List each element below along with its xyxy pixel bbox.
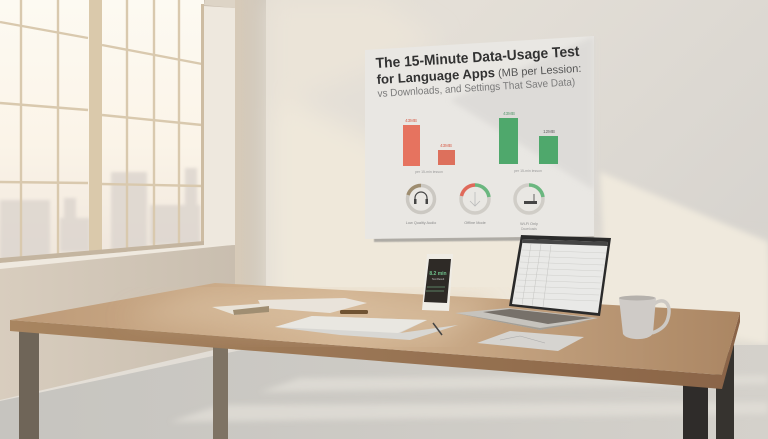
documents at front of desk bbox=[275, 316, 458, 340]
documents right of laptop bbox=[477, 331, 584, 351]
laptop screen bbox=[509, 235, 611, 316]
stacked papers on desk bbox=[212, 298, 368, 315]
diagonal sun band right of poster bbox=[600, 172, 768, 345]
gauge: low quality audio bbox=[406, 185, 436, 225]
gauge: wi-fi only: Wi-Fi Only bbox=[520, 222, 538, 226]
title: The 15-Minute Data-Usage Test bbox=[375, 44, 580, 72]
laptop bbox=[455, 235, 611, 330]
floor bbox=[0, 345, 768, 439]
right frame bbox=[201, 4, 204, 245]
city skyline bbox=[0, 168, 200, 260]
window bbox=[0, 0, 235, 269]
table bbox=[10, 283, 740, 389]
window reveal bbox=[204, 6, 235, 246]
title: vs Downloads, and Settings That Save Data) bbox=[377, 76, 576, 100]
bar chart: green: 43MB bbox=[503, 111, 515, 116]
wall poster bbox=[365, 36, 594, 242]
poster shadow bbox=[374, 236, 594, 242]
poster diagonal shade bbox=[450, 36, 594, 190]
bar chart: green bbox=[499, 111, 558, 173]
bar chart: green: 12MB bbox=[543, 129, 555, 134]
window frame bbox=[0, 0, 202, 258]
gauge: low quality audio: Low Quality Audio bbox=[406, 221, 436, 225]
smartphone: Test Result bbox=[432, 278, 444, 281]
bar chart: red bbox=[403, 118, 455, 174]
gauge: wi-fi only bbox=[515, 185, 543, 231]
shadowed wall band beside the window bbox=[235, 0, 266, 350]
lower frame bbox=[0, 241, 204, 263]
smartphone: 8.2 min bbox=[429, 271, 447, 277]
gauge: wi-fi only: Downloads bbox=[521, 227, 537, 231]
coffee mug bbox=[619, 296, 669, 339]
bar chart: green: per 15-min lesson bbox=[514, 169, 542, 173]
smartphone bbox=[422, 254, 453, 311]
window sill bbox=[0, 245, 232, 269]
gauge: offline mode bbox=[461, 185, 489, 225]
floor sun stripes bbox=[170, 375, 768, 422]
spreadsheet rows bbox=[514, 244, 606, 307]
laptop base bbox=[455, 308, 598, 330]
title: for Language Apps (MB per Lession: bbox=[376, 60, 582, 87]
bar chart: red: per 15-min lesson bbox=[415, 170, 443, 174]
table top bbox=[10, 283, 740, 375]
title bbox=[375, 44, 583, 100]
sunlight patches on wall bbox=[270, 0, 768, 345]
glass bbox=[0, 0, 204, 262]
bar chart: red: 43MB bbox=[440, 143, 452, 148]
left wall below window bbox=[0, 0, 235, 400]
poster board bbox=[365, 36, 594, 239]
bar chart: red: 43MB bbox=[405, 118, 417, 123]
gauge: offline mode: Offline Mode bbox=[464, 221, 486, 225]
central mullion bbox=[89, 0, 102, 253]
table edge bbox=[10, 312, 740, 389]
table sun glow bbox=[120, 292, 500, 342]
table legs bbox=[19, 328, 734, 439]
